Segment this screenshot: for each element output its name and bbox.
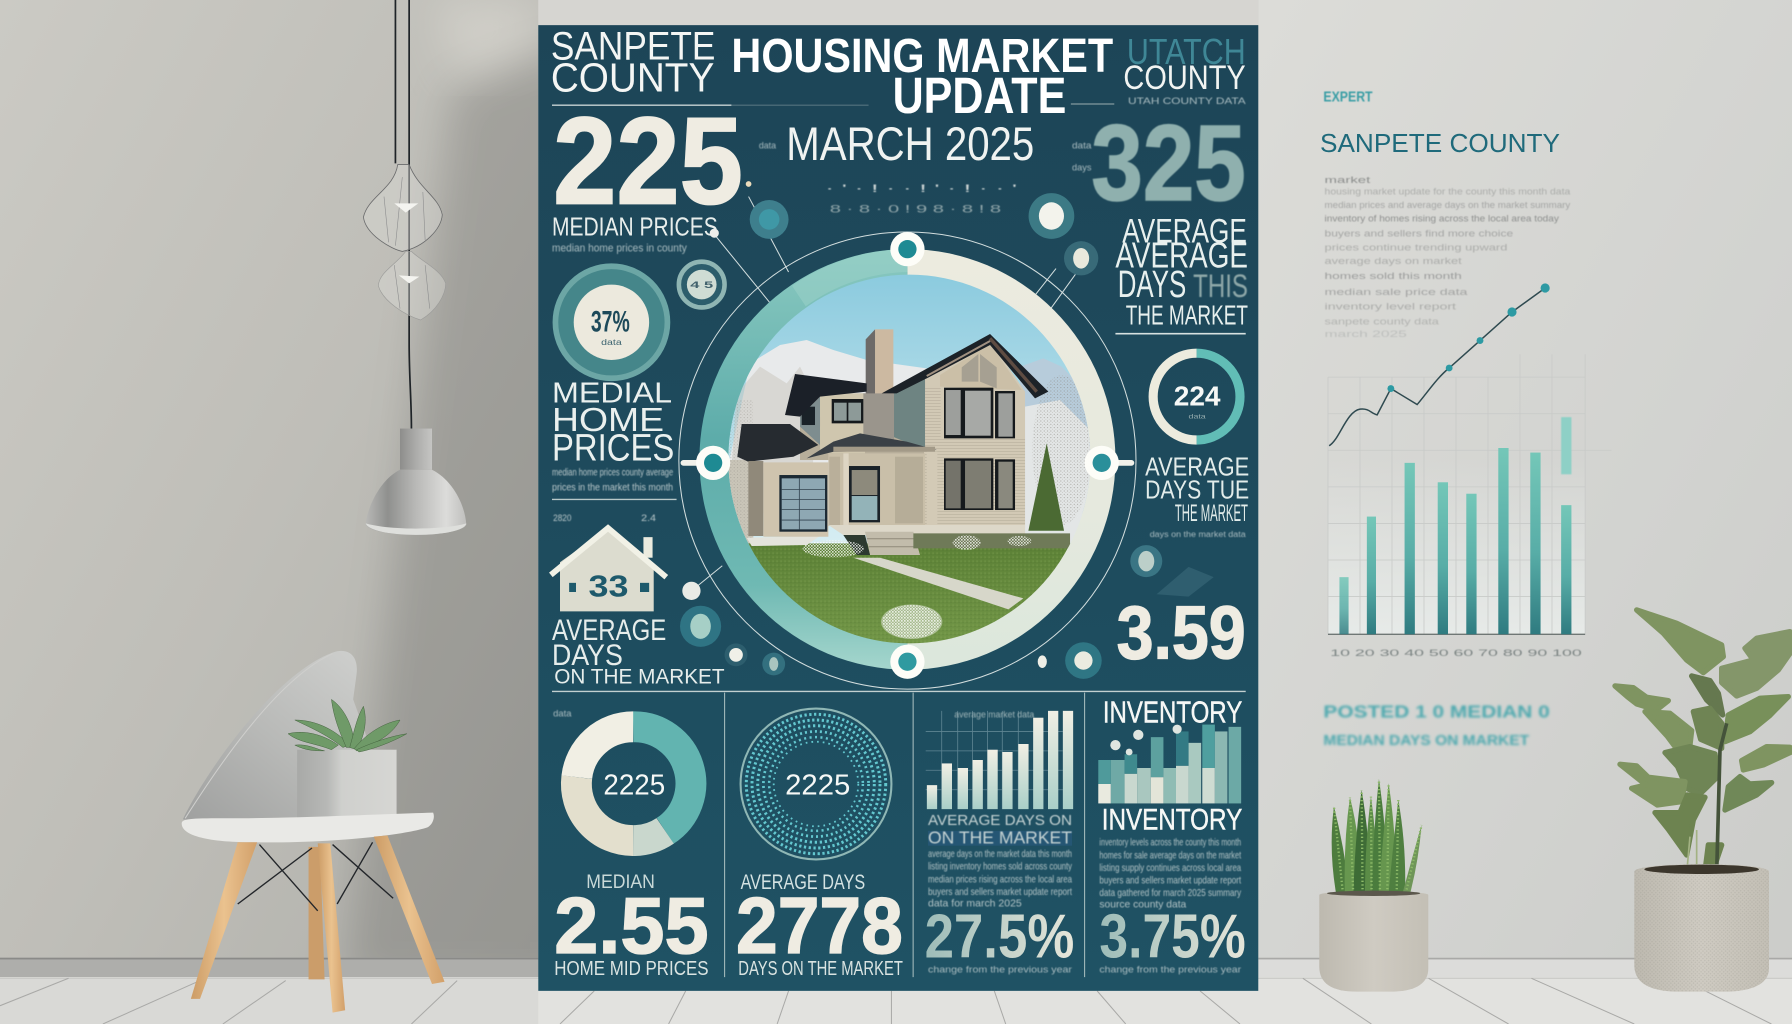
upper left roof — [785, 374, 867, 417]
right wing wall — [924, 340, 1025, 527]
body text — [928, 849, 1072, 909]
main roof — [882, 334, 1048, 398]
heading: Utatch County: UTATCH — [1127, 31, 1246, 72]
panel: average days on the market — [736, 709, 903, 980]
heading: Utatch County: COUNTY — [1123, 59, 1246, 97]
bars — [1339, 448, 1571, 634]
room scene with poster infographic: THE MARKET — [1175, 500, 1248, 527]
title — [731, 30, 1113, 124]
header rules — [552, 104, 1114, 105]
gauge: 37% — [555, 266, 667, 378]
axis labels: 10 20 30 40 50 60 70 80 90 100 — [1330, 648, 1582, 658]
text block: medial home prices: 2820 — [553, 513, 571, 523]
heading: Sanpete County — [551, 24, 715, 100]
body text — [1099, 838, 1242, 910]
small labels around the date: days — [1072, 162, 1092, 172]
heading: Sanpete County: COUNTY — [551, 54, 714, 100]
text block: average days right top: AVERAGE — [1122, 212, 1247, 250]
heading: Sanpete County: SANPETE — [551, 24, 715, 68]
panel: average days on the market: DAYS ON THE MARKET — [738, 957, 903, 980]
statistic: 225 median prices: MEDIAN PRICES — [552, 211, 718, 241]
panel: median home prices: MEDIAN — [586, 871, 655, 893]
upper left window — [832, 399, 863, 423]
date: March 2025: MARCH 2025 — [786, 118, 1034, 170]
body text: listing supply continues across local area — [1099, 863, 1242, 874]
donut chart — [576, 727, 691, 841]
ring marker nodes — [683, 232, 1131, 679]
text block: average days on the market: ON THE MARKET — [554, 663, 725, 688]
text block: medial home prices: median home prices county average — [552, 467, 673, 478]
panel: average days on the market: 2225 — [785, 769, 850, 801]
cone tree — [1028, 443, 1064, 531]
photo: house — [720, 270, 1100, 650]
chart panel tint — [1328, 457, 1585, 634]
body text: median prices rising across the local area — [928, 874, 1072, 885]
mountains — [727, 340, 927, 473]
panel: bar chart with market stats: ON THE MARKET — [928, 827, 1073, 847]
faded teal labels: POSTED 1 0 MEDIAN 0 — [1323, 702, 1550, 722]
text block: medial home prices: prices in the market this month — [552, 482, 673, 493]
statistic: 225 median prices: median home prices in county — [552, 242, 687, 254]
small labels around the date: 8 · 8 · 0 ! 9 8 · 8 ! 8 — [830, 204, 1001, 216]
bars — [927, 711, 1073, 809]
garage wall — [748, 461, 763, 536]
small gauge — [679, 262, 725, 307]
garage door — [779, 475, 827, 532]
small labels around the date: data — [759, 141, 777, 151]
wall chart: Sanpete County: SANPETE COUNTY — [1320, 128, 1560, 158]
body text: listing inventory homes sold across county — [928, 862, 1072, 873]
panel: bar chart with market stats: 27.5% — [925, 903, 1074, 972]
trend line — [1329, 288, 1545, 446]
bare tree — [1032, 375, 1091, 525]
text block: average days the market: DAYS TUE — [1145, 474, 1249, 504]
text block: average days right top: DAYS — [1118, 263, 1186, 305]
chair pot — [297, 750, 397, 819]
faded text block: buyers and sellers find more choice — [1325, 229, 1513, 239]
upper windows — [944, 388, 993, 438]
faded text block: median prices and average days on the market summary — [1325, 200, 1571, 210]
faded text block: median sale price data — [1325, 287, 1469, 297]
white flower bush — [881, 604, 942, 639]
panel: average days on the market: AVERAGE DAYS — [741, 869, 865, 894]
text block: medial home prices: MEDIAL — [552, 377, 672, 409]
faded text block: sanpete county data — [1325, 317, 1440, 327]
small gauge: 4 5 — [690, 280, 713, 290]
text block: average days right top: THE MARKET — [1126, 300, 1248, 331]
body text: inventory levels across the county this month — [1099, 838, 1241, 849]
chair with potted plant — [182, 651, 445, 1013]
plant leaves on chair — [288, 699, 407, 752]
photo ring — [699, 249, 1115, 670]
walkway — [853, 558, 1023, 609]
wall chart: Sanpete County — [1320, 90, 1611, 749]
text block: average days on the market: AVERAGE — [552, 614, 666, 647]
body text: buyers and sellers market update report — [1099, 875, 1241, 886]
dotted ring chart — [741, 709, 891, 859]
panel: median home prices: 2.55 — [554, 881, 709, 970]
body text: data for march 2025 — [928, 898, 1022, 909]
text block: average days on the market: DAYS — [552, 639, 623, 672]
body text: source county data — [1099, 899, 1187, 910]
small labels around the date: · ' · ! · · ! ' · ! · · ' — [825, 183, 1017, 195]
statistic: 3.59: 3.59 — [1117, 590, 1246, 674]
porch floor and steps — [828, 525, 1025, 535]
middle shaded wall — [894, 379, 925, 447]
floor planks — [0, 977, 1792, 1024]
panel: inventory — [1098, 694, 1246, 975]
small labels around the date — [759, 141, 1092, 216]
decorative bubbles lower — [680, 545, 1214, 679]
faded text block: inventory level report — [1325, 302, 1457, 312]
faded text block: housing market update for the county this month data — [1325, 186, 1571, 196]
wall chart: Sanpete County: MEDIAN DAYS ON MARKET — [1323, 733, 1529, 749]
statistic: 325: 325 — [1091, 103, 1246, 223]
faded text block: inventory of homes rising across the local area today — [1325, 214, 1559, 224]
faded text block: homes sold this month — [1325, 271, 1462, 281]
panel: median home prices: HOME MID PRICES — [554, 957, 709, 980]
text block: medial home prices — [552, 377, 677, 523]
heading: Utatch County — [1123, 31, 1247, 106]
text block: average days the market — [1145, 451, 1249, 539]
faded text block: market — [1325, 175, 1371, 185]
large potted plant — [1615, 610, 1790, 992]
panel: bar chart with market stats: average market data — [954, 710, 1035, 720]
faded text block: prices continue trending upward — [1325, 242, 1507, 252]
text block: average days right top: AVERAGE — [1115, 234, 1248, 275]
house body backing — [800, 393, 928, 460]
donut gauge: 224: 224 — [1174, 381, 1221, 412]
body text: average days on the market data this month — [928, 849, 1072, 860]
icon: house with number: 33 — [589, 569, 629, 604]
faded text block: march 2025 — [1325, 329, 1407, 339]
panel: average days on the market: 2778 — [736, 881, 903, 970]
body text: buyers and sellers market update report — [928, 887, 1072, 898]
text block: average days the market: days on the market data — [1150, 530, 1246, 539]
text block: average days on the market — [552, 614, 725, 688]
panel: inventory: INVENTORY — [1102, 804, 1242, 837]
chart grid — [926, 711, 1063, 809]
panel: bar chart with market stats — [925, 710, 1074, 975]
bubble nodes — [710, 181, 1098, 275]
icon: house with number — [551, 528, 666, 611]
title: HOUSING MARKET — [731, 30, 1113, 83]
area bar chart — [1098, 725, 1241, 803]
panel: inventory: change from the previous year — [1099, 965, 1241, 975]
lower windows — [944, 458, 993, 510]
poster panel — [538, 25, 1258, 991]
body text: homes for sale average days on the market — [1099, 850, 1241, 861]
text block: medial home prices: PRICES — [552, 427, 674, 469]
gauge: 37%: data — [601, 338, 622, 347]
panel: median home prices: 2225 — [603, 769, 665, 801]
text block: average days right top: THIS — [1193, 268, 1248, 304]
small planter — [1319, 779, 1428, 992]
panel: bar chart with market stats: change from the previous year — [928, 965, 1072, 975]
garage roof — [737, 424, 818, 462]
chart dots — [1110, 725, 1182, 755]
chart grid — [1328, 354, 1611, 634]
bottom panel dividers — [552, 691, 1246, 977]
chimney — [875, 329, 893, 396]
donut gauge: 224 — [1153, 353, 1240, 440]
gauge: 37%: 37% — [591, 305, 630, 338]
connector lines and floating nodes — [679, 197, 1136, 689]
heading: EXPERT — [1323, 90, 1373, 106]
panel: inventory: 3.75% — [1099, 903, 1246, 972]
text block: average days right top — [1115, 212, 1248, 334]
pendant lamp — [363, 0, 466, 535]
faded text block — [1325, 175, 1571, 339]
porch door — [849, 466, 880, 522]
text block: medial home prices: HOME — [552, 402, 664, 439]
porch roof — [807, 433, 937, 458]
text block: average days the market: AVERAGE — [1145, 451, 1249, 481]
text block: medial home prices: 2.4 — [641, 513, 656, 523]
panel: inventory: INVENTORY — [1103, 694, 1242, 729]
panel: median home prices — [553, 709, 709, 980]
title: UPDATE — [893, 66, 1066, 124]
upper left wall — [820, 393, 865, 453]
small labels around the date: data — [1072, 141, 1092, 151]
heading: Utatch County: UTAH COUNTY DATA — [1128, 96, 1247, 106]
statistic: 225 median prices: 225 — [553, 92, 743, 230]
shrubs — [913, 533, 1070, 548]
donut gauge: 224: data — [1189, 413, 1206, 420]
faded text block: average days on market — [1325, 256, 1462, 266]
body text: data gathered for march 2025 summary — [1099, 888, 1241, 899]
panel: bar chart with market stats: AVERAGE DAYS ON — [928, 813, 1072, 829]
porch — [828, 453, 925, 526]
lawn — [748, 543, 1070, 644]
panel: median home prices: data — [553, 709, 572, 719]
